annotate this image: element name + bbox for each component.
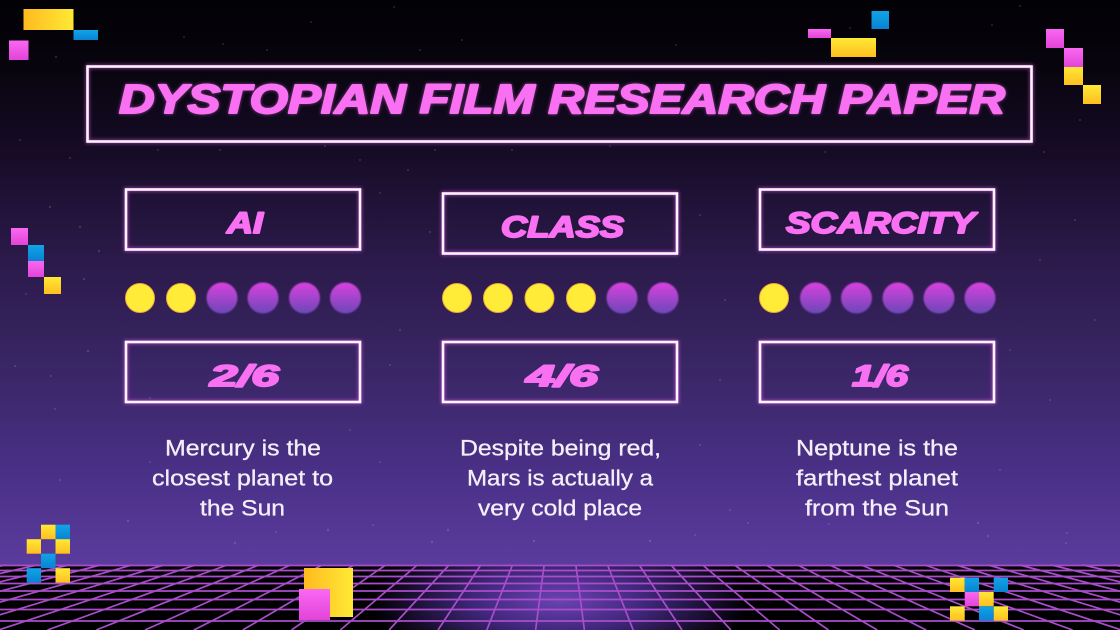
score box: 4/6: 4/6 bbox=[524, 360, 599, 393]
description: Mercury: closest planet to bbox=[152, 466, 333, 490]
title: DYSTOPIAN FILM RESEARCH PAPER bbox=[119, 76, 1005, 122]
heading box: Scarcity: SCARCITY bbox=[786, 207, 978, 240]
title: DYSTOPIAN FILM RESEARCH PAPER bbox=[119, 76, 1005, 122]
pixel cluster: bottom right bbox=[950, 578, 1008, 621]
panel: Class bbox=[442, 194, 678, 520]
description: Mercury: Mercury is the bbox=[165, 436, 321, 460]
heading box: Class bbox=[443, 194, 677, 254]
score box: 2/6 bbox=[126, 342, 360, 402]
description: Mars bbox=[460, 436, 661, 520]
pixel cluster: top centre right bbox=[808, 11, 889, 57]
pixel cluster: bottom left bbox=[27, 525, 70, 583]
heading box: Class: CLASS bbox=[501, 211, 624, 244]
description: Mars: Despite being red, bbox=[460, 436, 661, 460]
heading box: AI bbox=[126, 190, 360, 250]
description: Neptune: from the Sun bbox=[805, 496, 949, 520]
description: Mercury bbox=[152, 436, 333, 520]
rating dots: 2 of 6 bbox=[126, 282, 361, 314]
panel: AI bbox=[126, 190, 361, 520]
description: Mars: very cold place bbox=[478, 496, 642, 520]
pixel cluster: top right bbox=[1046, 29, 1101, 104]
heading box: Scarcity bbox=[760, 190, 994, 250]
pixel cluster: middle left bbox=[11, 228, 61, 294]
panel: Scarcity bbox=[760, 190, 996, 520]
pixel cluster: top left bbox=[9, 9, 98, 60]
rating dots: 1 of 6 bbox=[760, 282, 996, 314]
score box: 4/6 bbox=[443, 342, 677, 402]
score box: 2/6: 2/6 bbox=[208, 360, 279, 393]
heading box: AI: AI bbox=[226, 207, 264, 240]
title box bbox=[88, 66, 1032, 142]
description: Mercury: the Sun bbox=[200, 496, 285, 520]
description: Neptune: Neptune is the bbox=[796, 436, 958, 460]
description: Mars: Mars is actually a bbox=[467, 466, 654, 490]
score box: 1/6 bbox=[760, 342, 994, 402]
description: Neptune bbox=[796, 436, 958, 520]
overlapping squares: bottom centre left bbox=[299, 568, 353, 620]
neon grid floor bbox=[0, 565, 1120, 630]
description: Neptune: farthest planet bbox=[796, 466, 958, 490]
score box: 1/6: 1/6 bbox=[852, 360, 908, 393]
rating dots: 4 of 6 bbox=[442, 282, 678, 314]
